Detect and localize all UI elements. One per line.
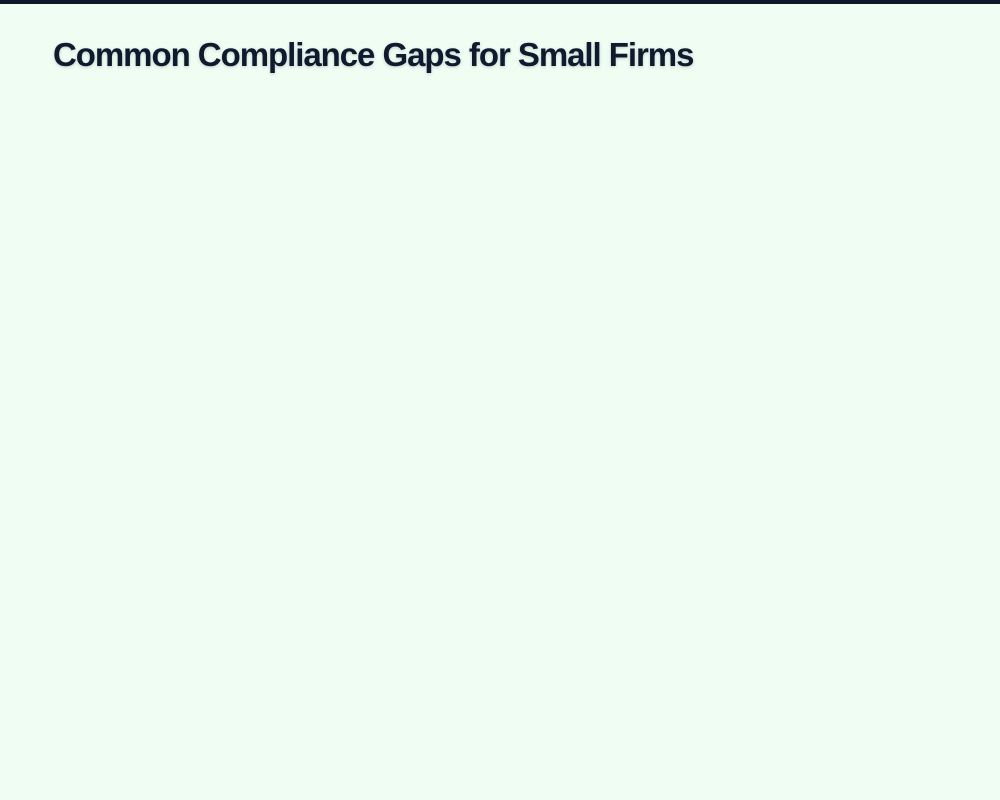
top accent bar <box>0 0 1000 4</box>
title: Common Compliance Gaps for Small Firms <box>53 36 693 73</box>
